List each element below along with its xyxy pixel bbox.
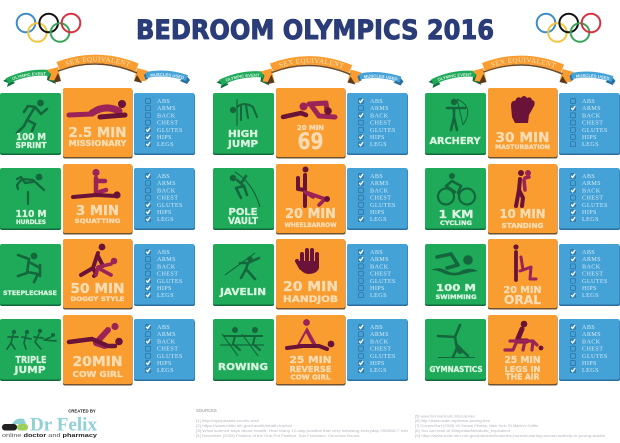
orange card: 25 min legs in the air <box>488 315 558 386</box>
orange card: 20 min oral: 20 MIN <box>504 285 542 296</box>
blue card: muscles used: ARMS <box>157 331 176 338</box>
blue card: muscles used: HIPS <box>157 285 172 292</box>
blue card: muscles used: ARMS <box>370 256 389 263</box>
green card: 100 m swimming: 100 M <box>436 283 476 294</box>
row: steeplechase <box>0 239 195 310</box>
sources left: [4] November (2005) Position of the One-Pot Position. San Francisco: Chronicle Books. <box>196 433 360 438</box>
blue card: muscles used: ABS <box>370 98 383 105</box>
orange card: 25 min legs in the air: LEGS IN <box>504 365 540 374</box>
blue card: muscles used: GLUTES <box>582 278 608 285</box>
green card: triple jump: TRIPLE <box>16 355 47 366</box>
green card: high jump: HIGH <box>228 129 258 140</box>
row: archery <box>425 88 620 158</box>
blue card: muscles used: HIPS <box>582 209 597 216</box>
green card: 110 m hurdles: 110 M <box>16 209 47 220</box>
blue card: muscles used: LEGS <box>157 216 174 223</box>
green card: archery <box>425 93 486 155</box>
blue card: muscles used: GLUTES <box>370 127 396 134</box>
green card: gymnastics <box>425 319 486 381</box>
column 3 <box>425 56 620 386</box>
green card: 1 km cycling: 1 KM <box>438 208 474 221</box>
green card: archery: ARCHERY <box>430 136 481 147</box>
blue card: muscles used: LEGS <box>582 141 599 148</box>
blue card: muscles used: GLUTES <box>582 127 608 134</box>
green card: pole vault: VAULT <box>228 216 258 227</box>
blue card: muscles used: ABS <box>157 324 170 331</box>
sources left: SOURCES <box>196 408 217 413</box>
blue card: muscles used: LEGS <box>582 292 599 299</box>
blue card: muscles used: ABS <box>370 324 383 331</box>
blue card: muscles used: CHEST <box>157 346 178 353</box>
sources left: [3] What science says about health: How Many 10-day positive that very following everyday 256960-7 min <box>196 428 408 433</box>
blue card: muscles used <box>347 93 408 155</box>
orange card: 20 min wheelbarrow: WHEELBARROW <box>284 222 337 229</box>
orange card: 25 min legs in the air: 25 MIN <box>504 355 540 366</box>
orange card: 20 min wheelbarrow <box>276 164 346 234</box>
green card: 1 km cycling <box>425 168 486 230</box>
column banners <box>216 57 404 88</box>
orange card: 25 min reverse cow girl: COW GIRL <box>290 374 331 382</box>
orange card: 20 min 69: 69 <box>298 130 324 155</box>
sources right: [8] You can read at Wikipedia/Metabolic_equivalent <box>415 428 511 433</box>
blue card: muscles used: LEGS <box>582 216 599 223</box>
orange card: 10 min standing <box>488 164 558 234</box>
blue card: muscles used <box>134 244 195 306</box>
blue card: muscles used: CHEST <box>370 346 391 353</box>
blue card: muscles used: LEGS <box>370 141 387 148</box>
blue card: muscles used: GLUTES <box>157 127 183 134</box>
orange card: 20 min handjob: 20 MIN <box>283 280 338 295</box>
blue card: muscles used: CHEST <box>582 195 603 202</box>
green card: pole vault: POLE <box>228 207 258 218</box>
blue card: muscles used: GLUTES <box>370 202 396 209</box>
orange card: 25 min reverse cow girl: REVERSE <box>290 365 332 374</box>
orange card: 25 min reverse cow girl <box>276 315 346 386</box>
blue card: muscles used: BACK <box>370 187 389 194</box>
blue card: muscles used: ABS <box>157 98 170 105</box>
blue card: muscles used: HIPS <box>157 360 172 367</box>
blue card: muscles used: CHEST <box>157 195 178 202</box>
blue card: muscles used: BACK <box>157 338 176 345</box>
green card: rowing: ROWING <box>218 362 268 373</box>
blue card: muscles used: HIPS <box>582 360 597 367</box>
blue card: muscles used: HIPS <box>157 209 172 216</box>
footer logo: created by Dr Felix: CREATED BY <box>68 408 96 414</box>
footer logo: created by Dr Felix <box>2 408 98 439</box>
blue card: muscles used: LEGS <box>157 367 174 374</box>
blue card: muscles used: HIPS <box>370 285 385 292</box>
row: 100m swimming <box>425 239 620 310</box>
green card: triple jump: JUMP <box>13 365 45 376</box>
blue card: muscles used <box>347 319 408 381</box>
blue card: muscles used: CHEST <box>370 120 391 127</box>
green card: 100 m sprint <box>0 93 61 155</box>
green card: 110 m hurdles: HURDLES <box>16 218 46 226</box>
blue card: muscles used: HIPS <box>370 360 385 367</box>
blue card: muscles used: GLUTES <box>582 202 608 209</box>
blue card: muscles used: BACK <box>157 112 176 119</box>
blue card: muscles used: ARMS <box>582 105 601 112</box>
blue card: muscles used <box>559 93 620 155</box>
blue card: muscles used: BACK <box>582 187 601 194</box>
blue card: muscles used <box>347 244 408 306</box>
blue card: muscles used: ABS <box>370 173 383 180</box>
footer logo: created by Dr Felix: Dr Felix <box>30 416 98 436</box>
blue card: muscles used: ARMS <box>370 331 389 338</box>
orange card: 20 min oral <box>488 239 558 310</box>
sources right: [6] http://www.usatf.org/stress-pricing-free <box>415 418 490 423</box>
orange card: 30 min masturbation: MASTURBATION <box>495 144 550 151</box>
blue card: muscles used: ABS <box>370 249 383 256</box>
sources left: [2] https://www.nhlbi.nih.gov/health/health-topics/ <box>196 423 293 428</box>
row: 100m sprint <box>0 88 195 158</box>
orange card: 3 min squatting: 3 MIN <box>76 204 119 219</box>
column 1 <box>0 55 195 386</box>
blue card: muscles used: ARMS <box>370 105 389 112</box>
green card: steeplechase <box>0 244 61 306</box>
green card: gymnastics: GYMNASTICS <box>430 365 482 374</box>
orange card: 20 min handjob <box>276 239 346 310</box>
orange card: 20 min cow girl: COW GIRL <box>72 370 122 379</box>
orange card: 20 min 69: 20 MIN <box>297 124 324 132</box>
blue card: muscles used: LEGS <box>370 292 387 299</box>
green card: rowing <box>213 319 274 381</box>
footer logo: created by Dr Felix: online doctor and pharmacy <box>2 433 98 439</box>
orange card: 25 min legs in the air: THE AIR <box>506 372 540 382</box>
icon: pills <box>2 419 28 430</box>
orange card: 50 min doggy style: 50 MIN <box>70 282 124 297</box>
blue card: muscles used: ARMS <box>582 331 601 338</box>
blue card: muscles used: CHEST <box>370 195 391 202</box>
blue card: muscles used: BACK <box>157 263 176 270</box>
orange card: 3 min squatting: SQUATTING <box>74 217 120 225</box>
blue card: muscles used: CHEST <box>582 120 603 127</box>
blue card: muscles used: GLUTES <box>157 202 183 209</box>
column banners <box>428 56 616 88</box>
blue card: muscles used: GLUTES <box>370 353 396 360</box>
row: rowing <box>213 315 408 386</box>
green card: 110 m hurdles <box>0 168 61 230</box>
blue card: muscles used <box>134 93 195 155</box>
blue card: muscles used: ABS <box>157 249 170 256</box>
orange card: 20 min cow girl <box>63 315 132 386</box>
orange card: 20 min handjob: HANDJOB <box>283 295 338 305</box>
orange card: 10 min standing: 10 MIN <box>500 207 546 221</box>
blue card: muscles used: HIPS <box>582 134 597 141</box>
blue card: muscles used: HIPS <box>370 134 385 141</box>
row: 110m hurdles <box>0 164 195 234</box>
row: triple jump <box>0 315 195 386</box>
blue card: muscles used: ABS <box>582 324 595 331</box>
blue card: muscles used: GLUTES <box>157 278 183 285</box>
icon: olympic rings left <box>17 14 80 42</box>
blue card: muscles used: HIPS <box>157 134 172 141</box>
orange card: 2.5 min missionary: MISSIONARY <box>68 139 127 148</box>
orange card: 2.5 min missionary <box>63 88 132 158</box>
green card: 1 km cycling: CYCLING <box>440 219 472 227</box>
sources left: [1] http://olympicstats.com/tv-rest/ <box>196 418 260 423</box>
blue card: muscles used: ABS <box>582 249 595 256</box>
blue card: muscles used: ARMS <box>582 180 601 187</box>
orange card: 3 min squatting <box>63 164 132 234</box>
blue card: muscles used: CHEST <box>370 271 391 278</box>
blue card: muscles used: ARMS <box>157 180 176 187</box>
blue card: muscles used: BACK <box>157 187 176 194</box>
column 2 <box>213 57 408 386</box>
blue card: muscles used: ABS <box>582 98 595 105</box>
green card: 100 m swimming <box>425 244 486 306</box>
blue card: muscles used <box>347 168 408 230</box>
blue card: muscles used: BACK <box>370 112 389 119</box>
title: BEDROOM OLYMPICS 2016 <box>136 15 494 46</box>
orange card: 20 min oral: ORAL <box>504 293 541 307</box>
green card: triple jump <box>0 319 61 381</box>
blue card: muscles used <box>559 244 620 306</box>
green card: pole vault <box>213 168 274 230</box>
blue card: muscles used: GLUTES <box>582 353 608 360</box>
orange card: 25 min reverse cow girl: 25 MIN <box>290 355 332 366</box>
green card: javelin <box>213 244 274 306</box>
row: javelin <box>213 239 408 310</box>
sources right: [7] Cooper/Hart (2005) 40 Sexual Fitness, New York: St Martin's Griffin <box>415 423 538 428</box>
blue card: muscles used <box>134 319 195 381</box>
blue card: muscles used: GLUTES <box>157 353 183 360</box>
green card: javelin: JAVELIN <box>219 287 266 298</box>
blue card: muscles used: BACK <box>370 338 389 345</box>
row: pole vault <box>213 164 408 234</box>
blue card: muscles used: HIPS <box>582 285 597 292</box>
sources left <box>196 408 408 438</box>
blue card: muscles used <box>559 319 620 381</box>
blue card: muscles used: ARMS <box>582 256 601 263</box>
row: high jump <box>213 88 408 158</box>
green card: 100 m sprint: 100 M <box>16 132 46 143</box>
blue card: muscles used: LEGS <box>582 367 599 374</box>
green card: 100 m sprint: SPRINT <box>16 141 47 150</box>
blue card: muscles used: LEGS <box>157 292 174 299</box>
column banners <box>3 55 190 87</box>
blue card: muscles used: GLUTES <box>370 278 396 285</box>
blue card: muscles used: ARMS <box>157 256 176 263</box>
blue card: muscles used: CHEST <box>157 120 178 127</box>
blue card: muscles used: LEGS <box>370 216 387 223</box>
blue card: muscles used: BACK <box>582 263 601 270</box>
sources right: [9] http://www.ncbi.nlm.nih.gov/pubmed/calories-burned-during-sexual-activity-in-young-adults <box>415 433 605 438</box>
blue card: muscles used: HIPS <box>370 209 385 216</box>
blue card: muscles used: ABS <box>157 173 170 180</box>
orange card: 10 min standing: STANDING <box>502 222 544 230</box>
blue card: muscles used <box>559 168 620 230</box>
orange card: 30 min masturbation: 30 MIN <box>496 131 550 146</box>
blue card: muscles used: BACK <box>582 112 601 119</box>
orange card: 20 min cow girl: 20MIN <box>72 355 122 370</box>
green card: high jump <box>213 93 274 155</box>
row: 1 km cycling <box>425 164 620 234</box>
orange card: 20 min 69 <box>276 88 346 158</box>
orange card: 20 min wheelbarrow: 20 MIN <box>285 207 336 222</box>
sources right <box>415 414 605 438</box>
blue card: muscles used: CHEST <box>157 271 178 278</box>
blue card: muscles used <box>134 168 195 230</box>
orange card: 50 min doggy style <box>63 239 132 310</box>
row: gymnastics <box>425 315 620 386</box>
orange card: 2.5 min missionary: 2.5 MIN <box>68 126 126 141</box>
blue card: muscles used: CHEST <box>582 271 603 278</box>
orange card: 30 min masturbation <box>488 88 558 158</box>
blue card: muscles used: CHEST <box>582 346 603 353</box>
orange card: 50 min doggy style: DOGGY STYLE <box>70 295 124 303</box>
green card: 100 m swimming: SWIMMING <box>436 293 476 301</box>
blue card: muscles used: LEGS <box>370 367 387 374</box>
blue card: muscles used: ARMS <box>157 105 176 112</box>
blue card: muscles used: ABS <box>582 173 595 180</box>
blue card: muscles used: BACK <box>370 263 389 270</box>
blue card: muscles used: BACK <box>582 338 601 345</box>
sources right: [5] www.fuhrmantools.info/calories <box>415 414 475 418</box>
green card: steeplechase: STEEPLECHASE <box>3 289 57 297</box>
blue card: muscles used: ARMS <box>370 180 389 187</box>
icon: olympic rings right <box>537 14 600 42</box>
green card: high jump: JUMP <box>227 139 258 150</box>
blue card: muscles used: LEGS <box>157 141 174 148</box>
